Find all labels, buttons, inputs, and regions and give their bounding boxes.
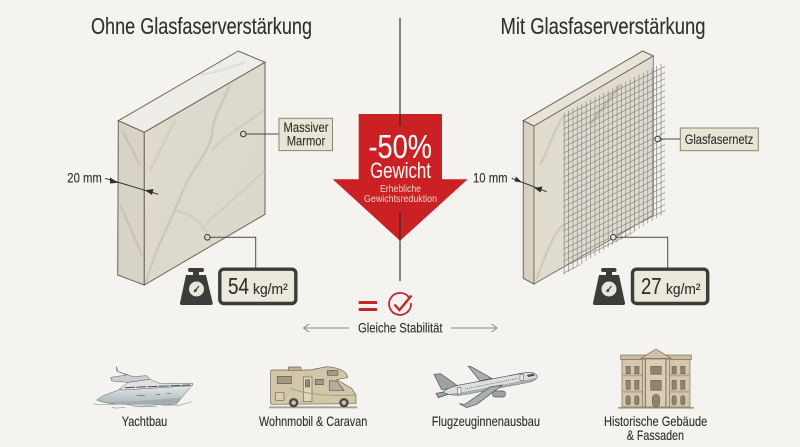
- weight display: 27 kg/m2: [593, 234, 708, 305]
- panel: solid marble slab: [118, 51, 265, 285]
- stability label with arrows: [304, 320, 497, 336]
- icon: historic building: [618, 349, 694, 409]
- label: Yachtbau: [122, 414, 167, 429]
- thin slab top face: [523, 51, 653, 126]
- icon: weight scale: [180, 268, 213, 305]
- icon: airplane: [434, 366, 537, 408]
- thin slab side face: [523, 121, 534, 284]
- label: Flugzeuginnenausbau: [432, 414, 540, 429]
- weight display: 27 kg/m2: kg/m²: [666, 281, 701, 298]
- label: Historische Gebäude: [604, 414, 707, 429]
- icon: yacht: [93, 367, 193, 408]
- slab front face: [144, 62, 265, 285]
- thin slab front face: [534, 56, 653, 284]
- icon: motorhome: [269, 367, 357, 408]
- marble veins: [120, 62, 265, 282]
- thickness label: 10 mm: 10 mm: [473, 171, 508, 186]
- thickness label: 20 mm: 20 mm: [67, 171, 102, 186]
- panel: reinforced thin slab with fiberglass mesh: [523, 51, 665, 284]
- heading: without fiberglass: Ohne Glasfaserverstärkung: [91, 13, 312, 39]
- red arrow: weight reduction: Gewichtsreduktion: [364, 193, 437, 205]
- callout: massive marble: Marmor: [287, 134, 326, 148]
- slab top face: [118, 51, 265, 132]
- weight display: 54 kg/m2: [180, 234, 296, 305]
- application: historic buildings and facades: [604, 349, 707, 443]
- marble veins: [536, 85, 620, 280]
- weight display: 54 kg/m2: 54: [228, 273, 249, 299]
- weight display: 54 kg/m2: kg/m²: [253, 281, 288, 298]
- application: historic buildings and facades: & Fassaden: [627, 428, 684, 443]
- red arrow: weight reduction: Erhebliche: [380, 183, 421, 195]
- red arrow: weight reduction: [333, 114, 468, 241]
- callout: fiberglass mesh: [655, 128, 758, 151]
- application: yacht building: [93, 367, 193, 429]
- application: motorhome and caravan: [259, 367, 367, 429]
- callout: massive marble: Massiver: [284, 120, 329, 135]
- red arrow: weight reduction: Gewicht: [370, 158, 431, 183]
- heading: with fiberglass: Mit Glasfaserverstärkung: [500, 13, 706, 39]
- application: aircraft interiors: [432, 366, 540, 429]
- stability label with arrows: Gleiche Stabilität: [358, 320, 443, 336]
- icon: weight scale: [593, 268, 625, 305]
- slab side face: [118, 121, 144, 285]
- callout: fiberglass mesh: Glasfasernetz: [685, 132, 753, 147]
- red arrow: weight reduction: -50%: [368, 128, 432, 165]
- center divider line: [399, 18, 401, 281]
- fiberglass mesh: [563, 62, 665, 275]
- icon: equal sign and check mark: [359, 293, 412, 315]
- label: Wohnmobil & Caravan: [259, 414, 367, 429]
- callout: massive marble: [240, 118, 332, 151]
- thickness label: 10 mm: [473, 171, 547, 192]
- thickness label: 20 mm: [67, 171, 158, 195]
- weight display: 27 kg/m2: 27: [641, 273, 662, 299]
